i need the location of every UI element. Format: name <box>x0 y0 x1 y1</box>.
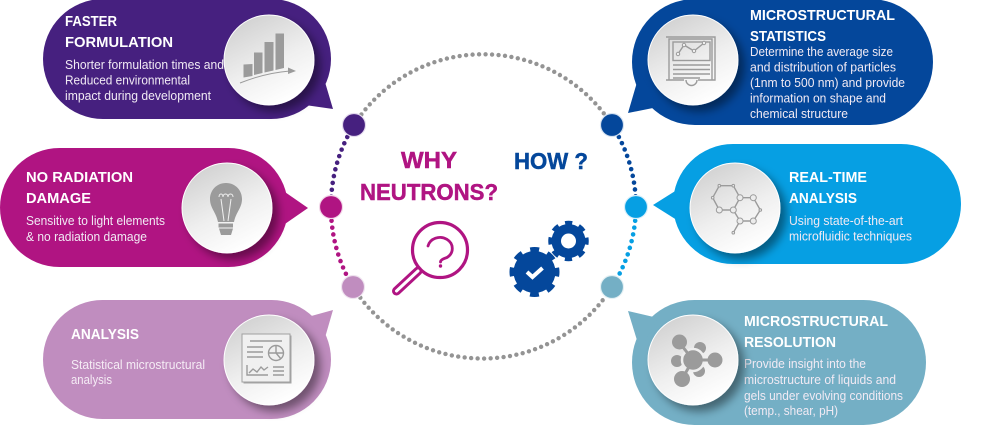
description: Provide insight into the <box>744 357 866 371</box>
speech bubble <box>0 148 308 267</box>
node: lilac <box>342 276 364 298</box>
icon: atom cluster <box>671 334 722 387</box>
description <box>26 214 165 244</box>
icon: magnifying glass with question mark <box>396 222 468 291</box>
medallion <box>224 15 314 105</box>
heading: ANALYSIS <box>71 326 139 343</box>
heading: STATISTICS <box>750 28 826 45</box>
description: analysis <box>71 373 112 387</box>
medallion <box>648 15 738 105</box>
heading <box>65 13 173 51</box>
heading: FORMULATION <box>65 34 173 51</box>
icon: molecule hexagons <box>711 184 762 234</box>
description: microfluidic techniques <box>789 230 912 244</box>
why neutrons heading: WHY <box>401 147 457 173</box>
large gear <box>512 250 557 294</box>
node: dark blue <box>600 114 624 136</box>
panel: real-time analysis <box>653 144 961 264</box>
speech bubble <box>43 300 333 419</box>
panel: faster formulation <box>43 0 333 119</box>
how heading: HOW ? <box>514 148 588 174</box>
description: Sensitive to light elements <box>26 214 165 228</box>
panel: analysis <box>43 300 333 419</box>
medallion <box>648 315 738 405</box>
description: Using state-of-the-art <box>789 214 903 228</box>
description <box>65 58 224 103</box>
heading: MICROSTRUCTURAL <box>744 313 888 330</box>
description: Determine the average size <box>750 45 893 59</box>
description: gels under evolving conditions <box>744 389 903 403</box>
description: & no radiation damage <box>26 230 147 244</box>
heading <box>26 169 133 207</box>
description: Reduced environmental <box>65 74 190 88</box>
panel: no radiation damage <box>0 148 308 267</box>
description: information on shape and <box>750 92 886 106</box>
speech bubble <box>653 144 961 264</box>
speech bubble <box>628 0 933 125</box>
node: cyan <box>624 196 648 218</box>
panel: microstructural statistics <box>628 0 933 125</box>
heading: RESOLUTION <box>744 334 836 351</box>
description: (1nm to 500 nm) and provide <box>750 76 905 90</box>
description: and distribution of particles <box>750 60 896 74</box>
icon: chart document <box>666 37 715 86</box>
heading <box>744 313 888 351</box>
heading: ANALYSIS <box>789 190 857 207</box>
why neutrons heading: NEUTRONS? <box>360 179 498 205</box>
heading: REAL-TIME <box>789 169 867 186</box>
heading: FASTER <box>65 13 117 30</box>
speech bubble <box>43 0 333 119</box>
description: microstructure of liquids and <box>744 373 896 387</box>
medallion <box>690 163 780 253</box>
speech bubble <box>628 300 926 425</box>
description: chemical structure <box>750 107 848 121</box>
medallion <box>224 315 314 405</box>
node: teal <box>600 276 624 298</box>
heading: DAMAGE <box>26 190 91 207</box>
lens <box>412 222 468 278</box>
small gear <box>550 223 586 259</box>
why neutrons heading <box>360 147 498 205</box>
description: Statistical microstructural <box>71 358 205 372</box>
description: impact during development <box>65 89 211 103</box>
description <box>744 357 903 418</box>
heading: NO RADIATION <box>26 169 133 186</box>
icon: light bulb <box>210 183 242 235</box>
node: magenta <box>320 196 342 218</box>
heading <box>750 7 895 45</box>
heading: MICROSTRUCTURAL <box>750 7 895 24</box>
node: purple <box>342 114 366 136</box>
icon: report document <box>242 334 292 384</box>
icon: gears with check mark <box>512 223 586 294</box>
description <box>750 45 905 121</box>
dotted ring <box>331 54 636 359</box>
icon: rising bar chart <box>240 34 296 83</box>
description <box>71 358 205 387</box>
description: Shorter formulation times and <box>65 58 224 72</box>
question mark <box>428 237 452 268</box>
handle <box>396 271 418 291</box>
panel: microstructural resolution <box>628 300 926 425</box>
medallion <box>182 163 272 253</box>
description <box>789 214 912 244</box>
heading <box>789 169 867 207</box>
description: (temp., shear, pH) <box>744 404 838 418</box>
